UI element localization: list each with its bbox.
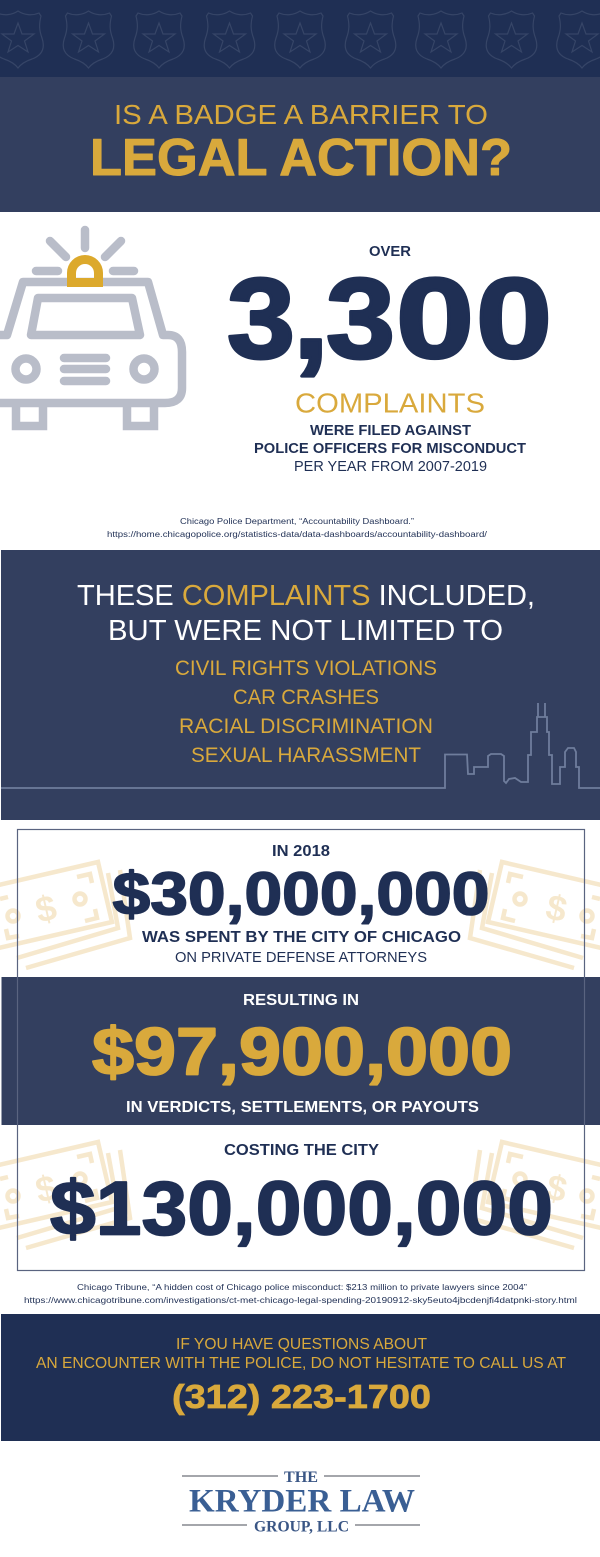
citation: police department: https://home.chicagopolice.org/statistics-data/data-dashboards/accountability-dashboard/ — [107, 529, 488, 539]
panel: costs band — [2, 977, 600, 1125]
big number: 3 — [326, 256, 395, 382]
title line two: LEGAL ACTION? — [90, 129, 512, 187]
statistic: 2018 defense spending — [112, 843, 490, 966]
icon: beacon light — [72, 260, 98, 282]
logo: the kryder law group: GROUP, LLC — [254, 1518, 349, 1536]
panel: call to action: IF YOU HAVE QUESTIONS ABOUT — [176, 1336, 428, 1353]
statistic: total cost — [50, 1142, 553, 1252]
heading: THESE COMPLAINTS INCLUDED, — [77, 580, 535, 612]
statistic: 2018 defense spending: IN 2018 — [272, 843, 330, 860]
icon: bills lower right — [470, 1142, 600, 1248]
big number: , — [293, 250, 329, 384]
citation: police department: Chicago Police Department, “Accountability Dashboard.” — [180, 516, 414, 526]
title line one: IS A BADGE A BARRIER TO — [114, 99, 488, 130]
icon: bills upper right: $ — [542, 886, 571, 930]
phone number: (312) 223-1700 — [172, 1378, 431, 1415]
top badge pattern band — [0, 0, 600, 77]
logo: the kryder law group — [182, 1469, 420, 1536]
icon: bills lower right: $ — [542, 1166, 571, 1210]
big number: 0 — [396, 256, 474, 382]
list of complaint types: RACIAL DISCRIMINATION — [179, 715, 433, 738]
panel: call to action: AN ENCOUNTER WITH THE POLICE, DO NOT HESITATE TO CALL US AT — [36, 1355, 567, 1372]
money icons — [0, 862, 600, 1248]
statistic: total cost: COSTING THE CITY — [224, 1142, 379, 1159]
list of complaint types — [175, 657, 437, 767]
list of complaint types: CIVIL RIGHTS VIOLATIONS — [175, 657, 437, 680]
citation: chicago tribune — [24, 1282, 577, 1305]
amount 97.9 million: $97,900,000 — [92, 1014, 512, 1090]
logo: the kryder law group: THE — [284, 1469, 318, 1486]
citation: chicago tribune: https://www.chicagotribune.com/investigations/ct-met-chicago-legal-spending-20190912-sky5euto4jbcdenjfi4datpnki-story.html — [24, 1295, 577, 1305]
citation: police department — [107, 516, 488, 539]
citation: chicago tribune: Chicago Tribune, “A hidden cost of Chicago police misconduct: $213 million to private lawyers since 2004” — [77, 1282, 527, 1292]
icon: bills lower left — [0, 1142, 130, 1248]
statistic: 2018 defense spending: ON PRIVATE DEFENSE ATTORNEYS — [175, 950, 427, 966]
frame around cost figures — [18, 830, 584, 1270]
description: POLICE OFFICERS FOR MISCONDUCT — [254, 441, 526, 457]
icon: bills upper right — [470, 862, 600, 968]
icon: chicago skyline — [1, 703, 600, 788]
statistic: verdicts and settlements: IN VERDICTS, SETTLEMENTS, OR PAYOUTS — [126, 1099, 479, 1116]
description: WERE FILED AGAINST — [310, 423, 471, 439]
big number: 0 — [476, 256, 552, 382]
statistic: 2018 defense spending: WAS SPENT BY THE CITY OF CHICAGO — [142, 929, 461, 946]
icon: police car — [0, 230, 182, 426]
big number: 3 — [227, 256, 295, 382]
panel: call to action — [1, 1314, 600, 1441]
icon: bills upper left: $ — [32, 886, 60, 931]
description: PER YEAR FROM 2007-2019 — [294, 459, 487, 475]
logo: the kryder law group: KRYDER LAW — [189, 1484, 415, 1520]
complaints word: COMPLAINTS — [295, 388, 485, 418]
panel: complaint types — [1, 550, 600, 820]
statistic: verdicts and settlements — [92, 992, 512, 1116]
panel: complaint types: BUT WERE NOT LIMITED TO — [108, 615, 503, 647]
statistic: complaints per year — [227, 244, 552, 475]
icon: bills upper left — [0, 862, 130, 968]
big number — [227, 250, 552, 384]
statistic: verdicts and settlements: RESULTING IN — [243, 992, 359, 1009]
icon: bills lower left: $ — [32, 1166, 60, 1211]
description — [254, 423, 526, 475]
list of complaint types: SEXUAL HARASSMENT — [191, 744, 421, 767]
over label: OVER — [369, 244, 412, 260]
title panel — [0, 77, 600, 212]
list of complaint types: CAR CRASHES — [233, 686, 379, 709]
amount thirty million: $30,000,000 — [112, 860, 490, 928]
amount 130 million: $130,000,000 — [50, 1166, 553, 1252]
